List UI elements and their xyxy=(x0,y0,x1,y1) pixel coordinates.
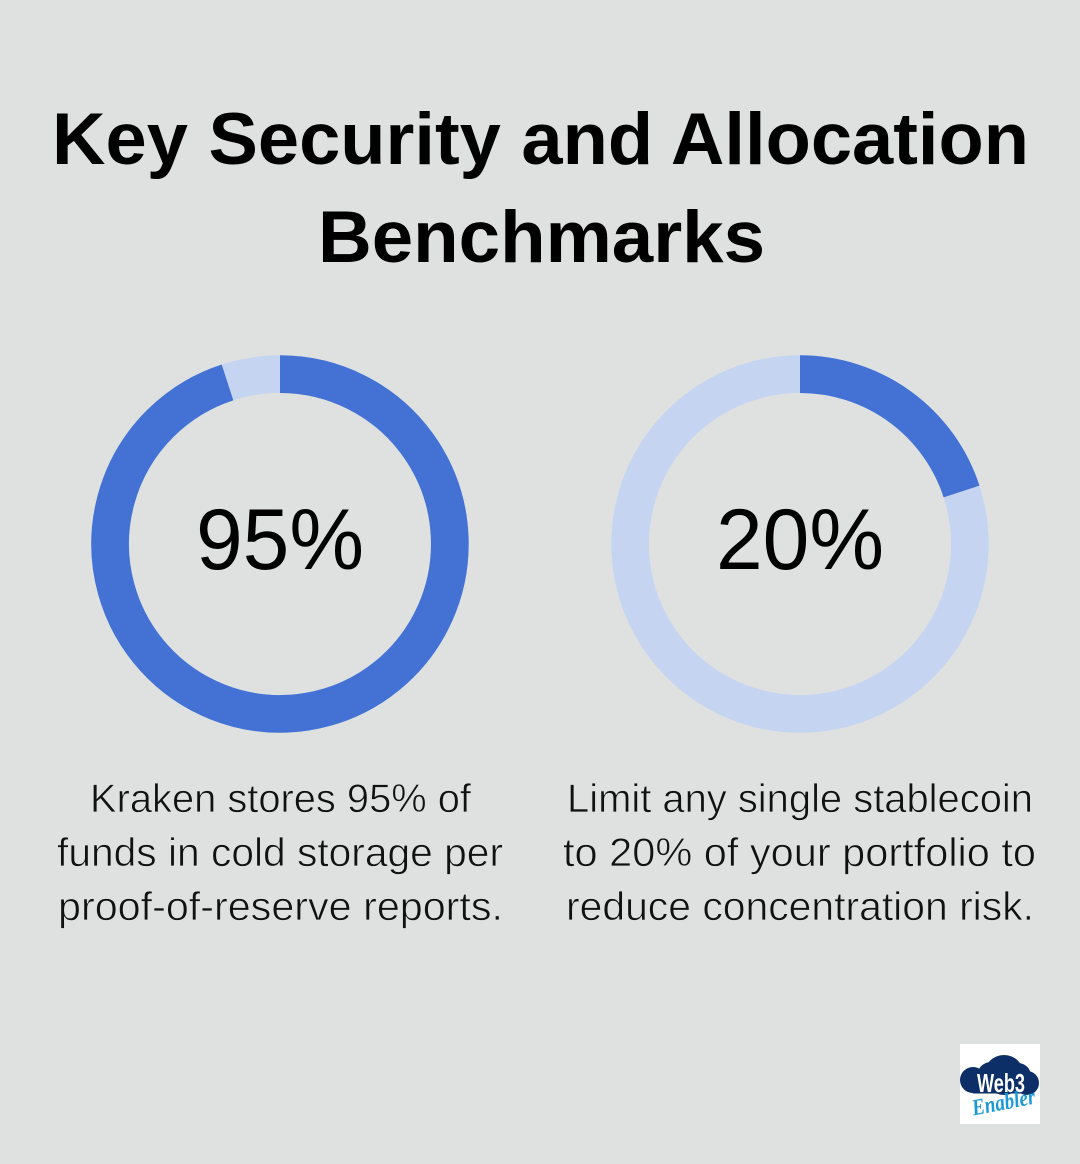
description: Kraken cold storage: funds in cold storage per xyxy=(57,831,503,875)
title: Benchmarks xyxy=(318,197,765,278)
panel: 95 percent benchmark xyxy=(57,374,503,929)
donut chart: 20% xyxy=(630,374,970,714)
donut chart: 95% xyxy=(110,374,450,714)
description: Kraken cold storage xyxy=(57,777,503,929)
logo: Web3 Enabler: Web3 xyxy=(977,1068,1025,1098)
title xyxy=(52,99,1029,278)
logo: Web3 Enabler xyxy=(960,1044,1040,1124)
logo: Web3 Enabler: Enabler xyxy=(969,1084,1038,1121)
value: 95%: 95% xyxy=(196,492,364,588)
value: 20%: 20% xyxy=(716,492,884,588)
description: stablecoin limit: reduce concentration risk. xyxy=(566,885,1034,929)
description: stablecoin limit xyxy=(563,777,1036,929)
description: stablecoin limit: to 20% of your portfolio to xyxy=(563,831,1036,875)
panel: 20 percent benchmark xyxy=(563,374,1036,929)
description: Kraken cold storage: Kraken stores 95% of xyxy=(90,777,472,821)
title: Key Security and Allocation xyxy=(52,99,1029,180)
description: stablecoin limit: Limit any single stablecoin xyxy=(567,777,1033,821)
description: Kraken cold storage: proof-of-reserve reports. xyxy=(58,885,503,929)
